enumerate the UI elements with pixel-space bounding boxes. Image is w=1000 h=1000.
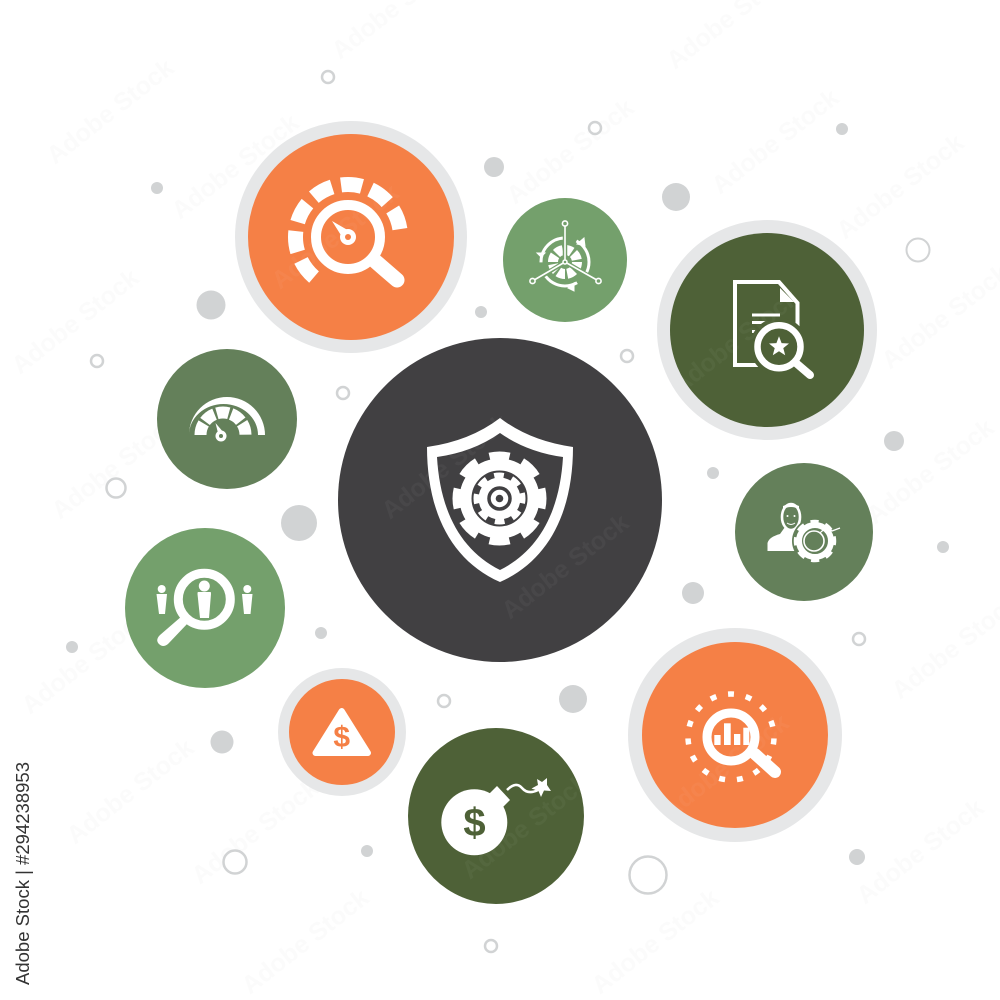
watermark over bubbles: Adobe Stock — [376, 409, 514, 525]
watermark pattern: Adobe Stock — [851, 794, 989, 910]
icon: gauge magnifier — [274, 163, 422, 311]
central bubble: shield with gear — [338, 338, 662, 662]
icon: bomb with dollar: $ — [463, 801, 486, 845]
watermark pattern: Adobe Stock — [831, 129, 969, 245]
bubble: person with gear — [735, 463, 873, 601]
watermark over bubbles: Adobe Stock — [496, 509, 634, 625]
watermark over bubbles: Adobe Stock — [456, 769, 594, 885]
icon: document with magnifier and star — [735, 282, 810, 376]
icon: person and gear — [768, 503, 840, 564]
watermark pattern: Adobe Stock — [16, 604, 154, 720]
watermark pattern: Adobe Stock — [61, 734, 199, 850]
watermark pattern: Adobe Stock — [501, 94, 639, 210]
icon: speedometer — [189, 397, 265, 458]
watermark over bubbles — [266, 179, 804, 885]
watermark pattern: Adobe Stock — [186, 774, 324, 890]
icon: warning triangle with dollar: $ — [333, 721, 350, 754]
bubble: speedometer — [157, 349, 297, 489]
bubble: gauge magnifier — [235, 121, 467, 353]
watermark pattern: Adobe Stock — [46, 409, 184, 525]
watermark over bubbles: Adobe Stock — [666, 284, 804, 400]
decorative filled dots — [66, 123, 949, 865]
watermark pattern: Adobe Stock — [861, 414, 999, 530]
watermark pattern: Adobe Stock — [6, 264, 144, 380]
decorative ring dots — [91, 71, 930, 952]
watermark over bubbles: Adobe Stock — [266, 179, 404, 295]
watermark pattern: Adobe Stock — [41, 54, 179, 170]
bubble: people search — [125, 528, 285, 688]
watermark pattern: Adobe Stock — [706, 84, 844, 200]
icon: shield outline — [427, 418, 573, 582]
bubble: dollar warning triangle — [278, 668, 406, 796]
icon: bomb with dollar — [441, 778, 551, 855]
bubble: money bomb — [408, 728, 584, 904]
icon: gear — [456, 456, 542, 542]
bubble: analytics magnifier — [628, 628, 842, 842]
stock id label: Adobe Stock | #294238953 — [13, 762, 33, 985]
bubble: network gears cycle — [503, 198, 627, 322]
watermark pattern: Adobe Stock — [236, 884, 374, 1000]
watermark pattern: Adobe Stock — [166, 109, 304, 225]
icon: magnifier with people — [156, 573, 252, 646]
watermark pattern: Adobe Stock — [586, 884, 724, 1000]
icon: three-axis gear cycle — [530, 221, 601, 291]
icon: magnifier with bars — [688, 694, 775, 780]
bubble: document search — [657, 220, 877, 440]
watermark over bubbles: Adobe Stock — [656, 709, 794, 825]
